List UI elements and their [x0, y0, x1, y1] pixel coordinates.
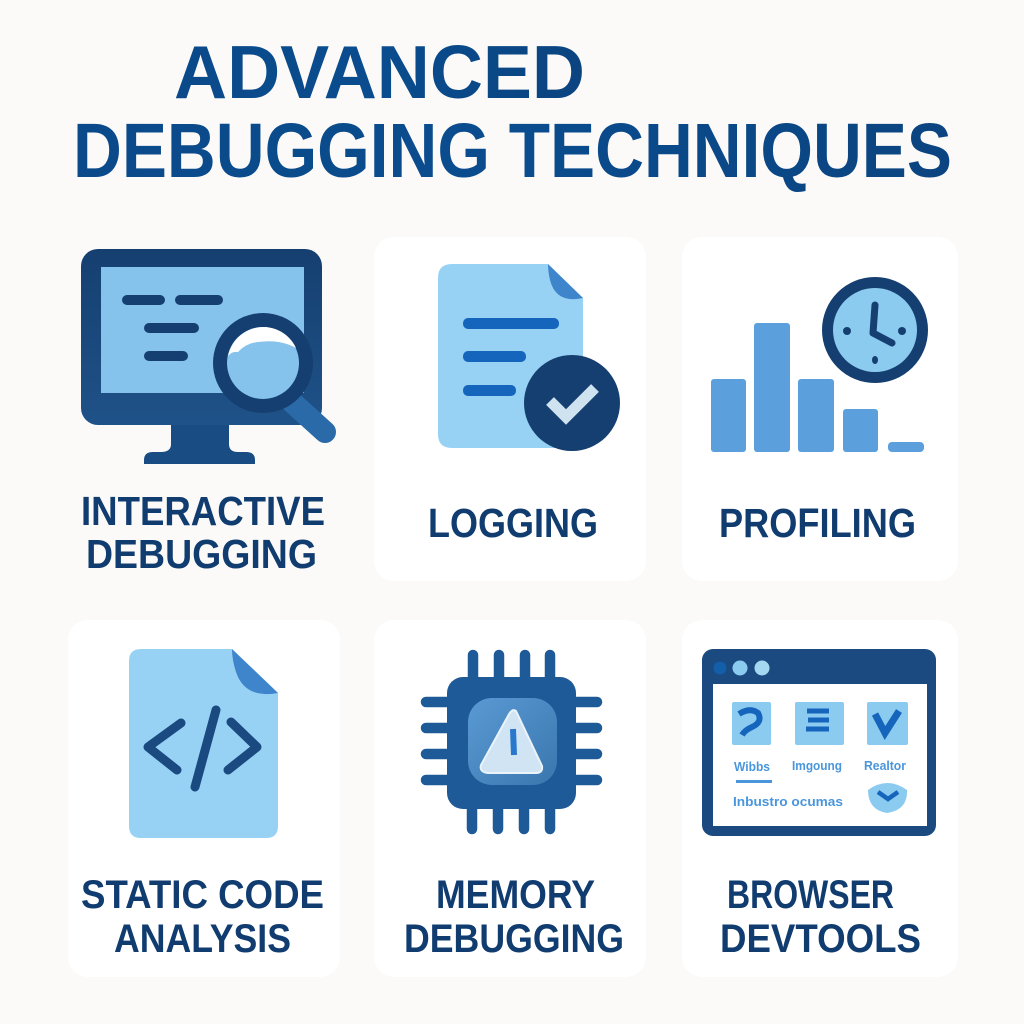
- label: interactive debugging: [81, 488, 325, 577]
- label: browser devtools: BROWSER: [727, 873, 894, 917]
- panel: logging: [374, 237, 646, 581]
- icon: log document with check: [438, 264, 620, 451]
- label: memory debugging: [404, 873, 624, 961]
- icon: bars and clock: [711, 277, 928, 452]
- icon: browser window: Inbustro ocumas: [733, 794, 843, 809]
- label: browser devtools: DEVTOOLS: [720, 917, 921, 961]
- icon: monitor with magnifier: [81, 249, 325, 464]
- icon: browser window: Realtor: [864, 758, 906, 773]
- panel: browser devtools: [682, 620, 958, 977]
- title: [73, 30, 952, 194]
- panel: interactive debugging: [81, 249, 325, 577]
- label: static code analysis: STATIC CODE: [81, 873, 324, 917]
- label: interactive debugging: DEBUGGING: [86, 531, 317, 577]
- label: interactive debugging: INTERACTIVE: [81, 488, 325, 534]
- label: memory debugging: MEMORY: [436, 873, 595, 917]
- label: browser devtools: [720, 873, 921, 961]
- icon: browser window: [702, 649, 936, 836]
- panel: profiling: [682, 237, 958, 581]
- label: profiling: PROFILING: [719, 500, 916, 546]
- panel: memory debugging: [374, 620, 646, 977]
- icon: browser window: Wibbs: [734, 759, 770, 774]
- icon: memory chip with warning: [426, 655, 597, 829]
- label: static code analysis: [81, 873, 324, 961]
- label: logging: LOGGING: [428, 500, 598, 546]
- label: memory debugging: DEBUGGING: [404, 917, 624, 961]
- icon: browser window: Imgoung: [792, 758, 842, 773]
- icon: code document: [129, 649, 278, 838]
- panel: static code analysis: [68, 620, 340, 977]
- title: ADVANCED: [174, 30, 585, 114]
- label: static code analysis: ANALYSIS: [114, 917, 291, 961]
